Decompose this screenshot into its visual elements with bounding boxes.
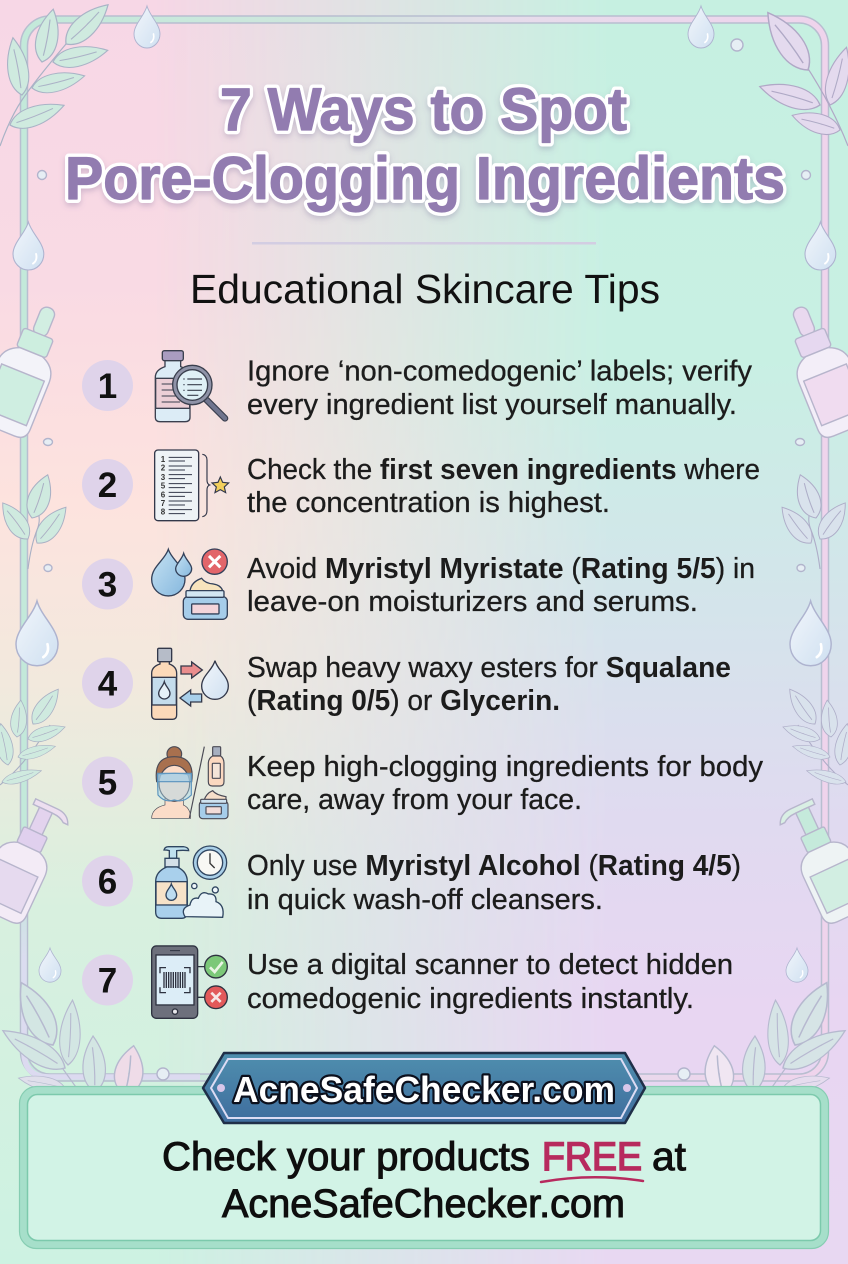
tip 7 text: Use a digital scanner to detect hidden — [247, 949, 733, 981]
tip 7 text: comedogenic ingredients instantly. — [247, 983, 694, 1015]
icon: numbered list with star: 3 — [161, 473, 166, 482]
tip 3 text — [247, 553, 755, 618]
title: Pore-Clogging Ingredients — [65, 145, 785, 212]
website banner — [203, 1053, 645, 1123]
number badge 4: 4 — [98, 664, 118, 704]
icon: numbered list with star: 1 — [161, 455, 166, 464]
icon: numbered list with star: 5 — [161, 482, 166, 491]
side leaves left — [0, 471, 73, 787]
leaves: top left branch — [0, 0, 115, 146]
number badge 7: 7 — [98, 962, 117, 1000]
number badge 5: 5 — [98, 764, 117, 802]
tip 1 text — [247, 356, 753, 421]
tip 5 text: care, away from your face. — [247, 784, 582, 816]
tip 1 text: every ingredient list yourself manually. — [247, 389, 737, 421]
tip 5 text: Keep high-clogging ingredients for body — [247, 751, 764, 783]
icon: bottle swap arrows and drop — [152, 648, 228, 719]
pump bottle left — [0, 793, 73, 927]
small bubbles — [38, 39, 810, 1080]
tip 7 — [82, 946, 733, 1018]
leaves: top right branch — [757, 5, 848, 146]
FREE underline — [541, 1177, 643, 1182]
number badge 3: 3 — [98, 566, 117, 604]
background gradient right side — [222, 0, 848, 1264]
pump bottle right — [775, 793, 848, 927]
bottom right leaves — [700, 976, 848, 1097]
number badge 2 — [82, 459, 133, 510]
number badge 1 — [82, 360, 133, 411]
tip 6 text: Only use Myristyl Alcohol (Rating 4/5) — [247, 850, 741, 882]
number badge 5 — [82, 756, 133, 808]
tip 1 — [82, 351, 753, 422]
dropper bottle left — [0, 297, 75, 441]
icon: numbered list with star: 6 — [161, 490, 166, 499]
dropper bottle right — [773, 297, 848, 441]
tip 2 text: Check the first seven ingredients where — [247, 454, 760, 486]
tip 5 text — [247, 751, 764, 816]
tip 7 text — [247, 949, 733, 1015]
tip 6 text — [247, 850, 741, 916]
number badge 1: 1 — [98, 367, 117, 406]
number badge 2: 2 — [98, 466, 117, 505]
website banner: AcneSafeChecker.com — [233, 1069, 615, 1110]
tip 6 text: in quick wash-off cleansers. — [247, 884, 603, 916]
call to action text: AcneSafeChecker.com — [222, 1182, 625, 1226]
water drops — [13, 6, 836, 982]
call to action panel — [20, 1086, 828, 1248]
title divider — [252, 242, 596, 244]
call to action text: FREE — [542, 1135, 642, 1179]
tip 6 — [82, 846, 741, 918]
icon: face with shield and products — [152, 747, 228, 819]
tip 2 text — [247, 454, 760, 519]
tip 2 text: the concentration is highest. — [247, 487, 610, 519]
tip 3 text: Avoid Myristyl Myristate (Rating 5/5) in — [247, 553, 755, 585]
call to action text: Check your products — [162, 1135, 530, 1179]
tip 4 text: Swap heavy waxy esters for Squalane — [247, 652, 731, 684]
icon: phone barcode scanner — [152, 946, 227, 1018]
icon: drops, cross and cream jar — [152, 549, 227, 619]
icon: numbered list with star: 7 — [161, 499, 166, 508]
tip 1 text: Ignore ‘non-comedogenic’ labels; verify — [247, 356, 753, 388]
number badge 4 — [82, 658, 133, 708]
tip 5 — [82, 747, 764, 819]
bottom left leaves — [0, 976, 148, 1097]
tip 3 — [82, 549, 755, 619]
tip 2 — [82, 450, 760, 521]
subtitle: Educational Skincare Tips — [190, 266, 660, 312]
icon: numbered list with star — [155, 450, 229, 521]
tip 4 text — [247, 652, 731, 717]
title: Pore-Clogging Ingredients — [65, 145, 785, 212]
title: 7 Ways to Spot — [220, 76, 627, 143]
call to action text — [162, 1135, 686, 1226]
tip 4 text: (Rating 0/5) or Glycerin. — [247, 685, 560, 717]
icon: numbered list with star: 2 — [161, 464, 166, 473]
tip 3 text: leave-on moisturizers and serums. — [247, 586, 698, 618]
decorative frame — [24, 20, 825, 1078]
icon: cleanser pump, clock and foam — [156, 846, 227, 918]
title: 7 Ways to Spot — [220, 76, 627, 143]
tip 4 — [82, 648, 731, 719]
number badge 6 — [82, 856, 133, 906]
icon: bottle and magnifier — [155, 351, 225, 422]
icon: numbered list with star: 8 — [161, 508, 166, 517]
call to action text: at — [652, 1135, 686, 1179]
number badge 6: 6 — [98, 862, 117, 902]
side leaves right — [775, 471, 848, 787]
title — [65, 76, 785, 212]
number badge 7 — [82, 954, 133, 1006]
number badge 3 — [82, 558, 133, 610]
